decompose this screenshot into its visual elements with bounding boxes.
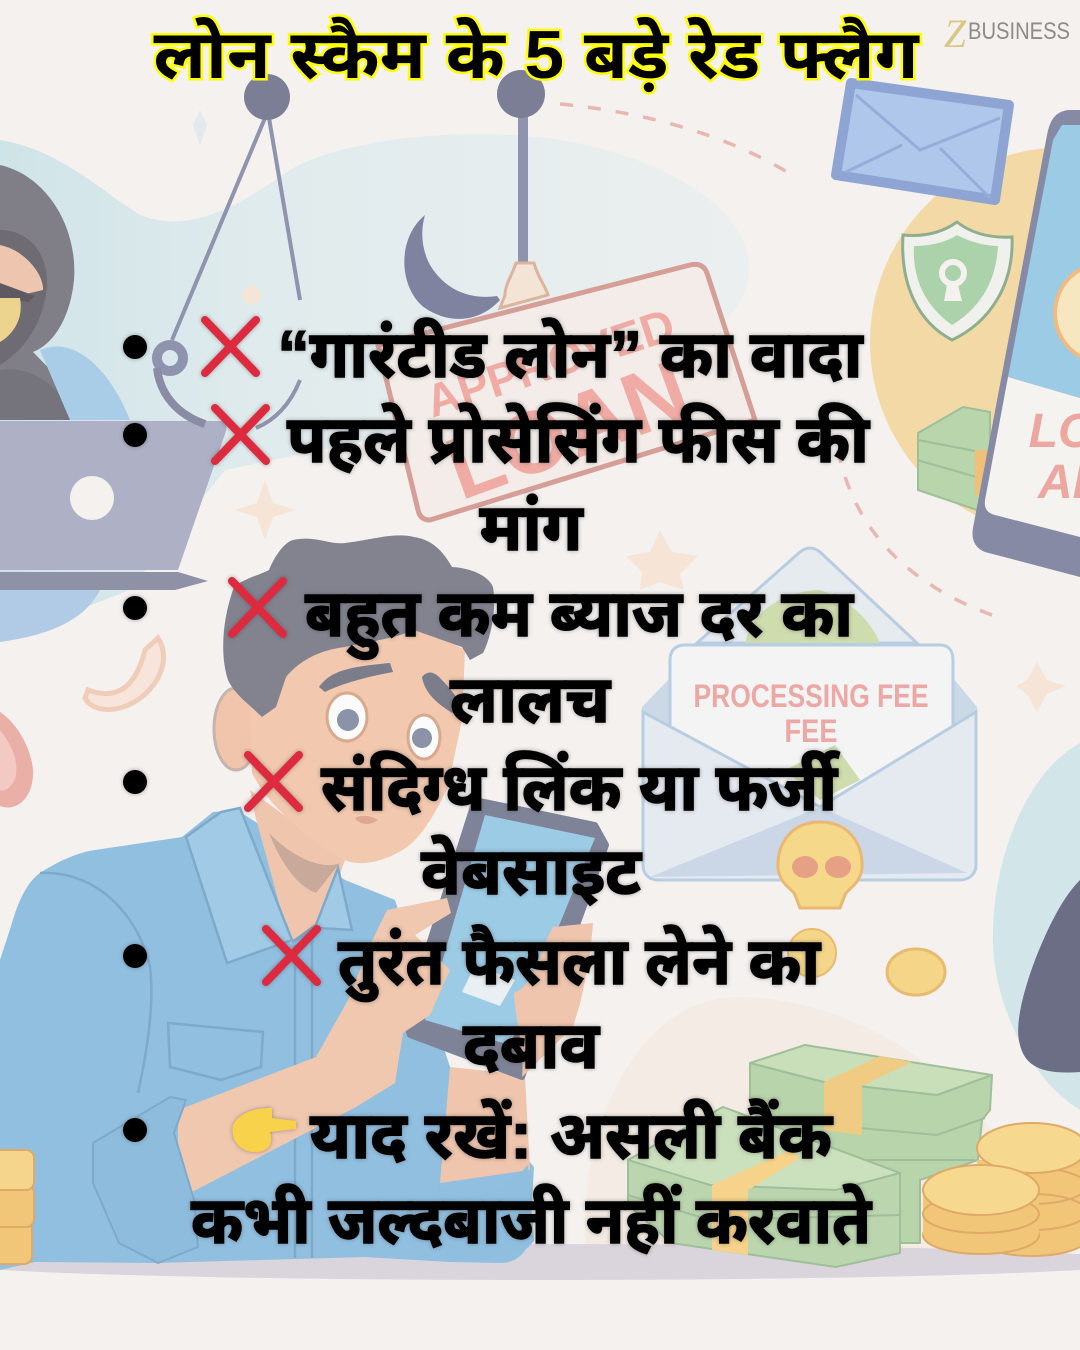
face bbox=[250, 625, 465, 863]
bullet 1 bbox=[123, 335, 147, 359]
left arm and hand bbox=[178, 898, 451, 1193]
reminder text line 2: कभी जल्दबाजी नहीं करवाते bbox=[191, 1183, 872, 1257]
icon: pointing hand bbox=[232, 1108, 296, 1152]
beige blob behind money bbox=[585, 997, 1050, 1270]
icon: red cross 1 bbox=[205, 320, 256, 373]
icon: suit on right bbox=[1018, 880, 1080, 1073]
ear bbox=[214, 688, 258, 770]
lower stack body bbox=[628, 1107, 900, 1267]
flag 3 text line 1: बहुत कम ब्याज दर का bbox=[305, 576, 855, 660]
dashed path bbox=[560, 104, 1000, 618]
icon: cash by phone bbox=[917, 407, 990, 515]
flag 1 text: “गारंटीड लोन” का वादा bbox=[278, 317, 864, 391]
eyebrows bbox=[319, 663, 393, 692]
icon: processing fee envelope bbox=[642, 548, 977, 880]
flag 5 text line 1: तुरंत फैसला लेने का bbox=[338, 924, 822, 1002]
bullet 2 bbox=[123, 423, 147, 447]
icon: coin stacks bbox=[923, 1123, 1080, 1256]
icon: skull bbox=[778, 822, 862, 908]
left cuff bbox=[93, 1097, 198, 1263]
logo: Z Business: Z bbox=[944, 11, 967, 56]
lower stack band bbox=[712, 1150, 800, 1255]
title: लोन स्कैम के 5 बड़े रेड फ्लैग bbox=[154, 17, 920, 93]
icon: fish hook bbox=[404, 70, 548, 319]
icon: approved loan stamp: APPROVED bbox=[419, 298, 681, 427]
flag 4 text line 2: वेबसाइट bbox=[421, 834, 642, 908]
icon: approved loan stamp: LOAN bbox=[433, 340, 702, 518]
icon: red cross 5 bbox=[266, 929, 317, 982]
reminder text line 1: याद रखें: असली बैंक bbox=[310, 1098, 833, 1172]
mouth bbox=[355, 816, 378, 824]
right cuff bbox=[438, 1165, 534, 1260]
bullet 3 bbox=[123, 596, 147, 620]
upper stack band bbox=[824, 1056, 912, 1135]
flag 2 text line 2: मांग bbox=[480, 490, 584, 564]
neck bbox=[250, 790, 345, 943]
icon: worried man bbox=[0, 535, 606, 1270]
icon: scale bbox=[157, 74, 300, 428]
phone bbox=[405, 800, 606, 1077]
icon: left ribbon hook bbox=[85, 638, 164, 710]
bullet 6 bbox=[123, 1118, 147, 1142]
floor shadow bbox=[0, 1244, 1080, 1280]
hair bbox=[223, 535, 494, 717]
yellow circle behind phone bbox=[870, 147, 1080, 537]
shirt seams bbox=[40, 873, 312, 1258]
flag 3 text line 2: लालच bbox=[450, 662, 611, 736]
icon: hacker bbox=[0, 165, 130, 420]
flag 2 text line 1: पहले प्रोसेसिंग फीस की bbox=[287, 402, 871, 476]
shirt bbox=[0, 810, 534, 1270]
right fingers bbox=[514, 923, 593, 1077]
teal background blob bbox=[0, 134, 749, 640]
icon: left coin stack bbox=[0, 1150, 34, 1264]
icon: red coin left bbox=[0, 712, 33, 808]
upper stack body bbox=[750, 1063, 992, 1243]
collar bbox=[186, 808, 292, 963]
lower stack top bbox=[628, 1107, 900, 1190]
icon: processing fee envelope: FEE bbox=[784, 713, 838, 749]
right blue blob bbox=[993, 743, 1080, 1110]
phone app block bbox=[462, 965, 515, 1006]
list: red flags bbox=[123, 317, 872, 1257]
logo: Z Business bbox=[944, 11, 1070, 56]
icon: shield bbox=[903, 222, 1012, 340]
neck shadow bbox=[269, 833, 340, 893]
icon: laptop bbox=[0, 421, 227, 642]
flag 4 text line 1: संदिग्ध लिंक या फर्जी bbox=[321, 750, 840, 824]
upper stack top bbox=[750, 1045, 992, 1095]
eyes bbox=[327, 693, 367, 741]
bullet 5 bbox=[123, 944, 147, 968]
icon: small coins bbox=[788, 929, 945, 995]
icon: smartphone with loan approved bbox=[972, 110, 1080, 577]
icon: red cross 3 bbox=[232, 581, 283, 634]
decorative stars bbox=[193, 110, 1066, 712]
phone screen bbox=[425, 815, 595, 1045]
icon: processing fee envelope: PROCESSING FEE bbox=[694, 678, 928, 714]
icon: money stacks bbox=[628, 1045, 992, 1267]
flag 5 text line 2: दबाव bbox=[463, 1008, 600, 1082]
icon: red cross 4 bbox=[248, 755, 299, 808]
bullet 4 bbox=[123, 770, 147, 794]
right forearm bbox=[440, 1067, 530, 1183]
icon: blue envelope bbox=[836, 83, 1009, 200]
icon: approved loan stamp bbox=[378, 264, 755, 520]
icon: red cross 2 bbox=[215, 408, 266, 461]
